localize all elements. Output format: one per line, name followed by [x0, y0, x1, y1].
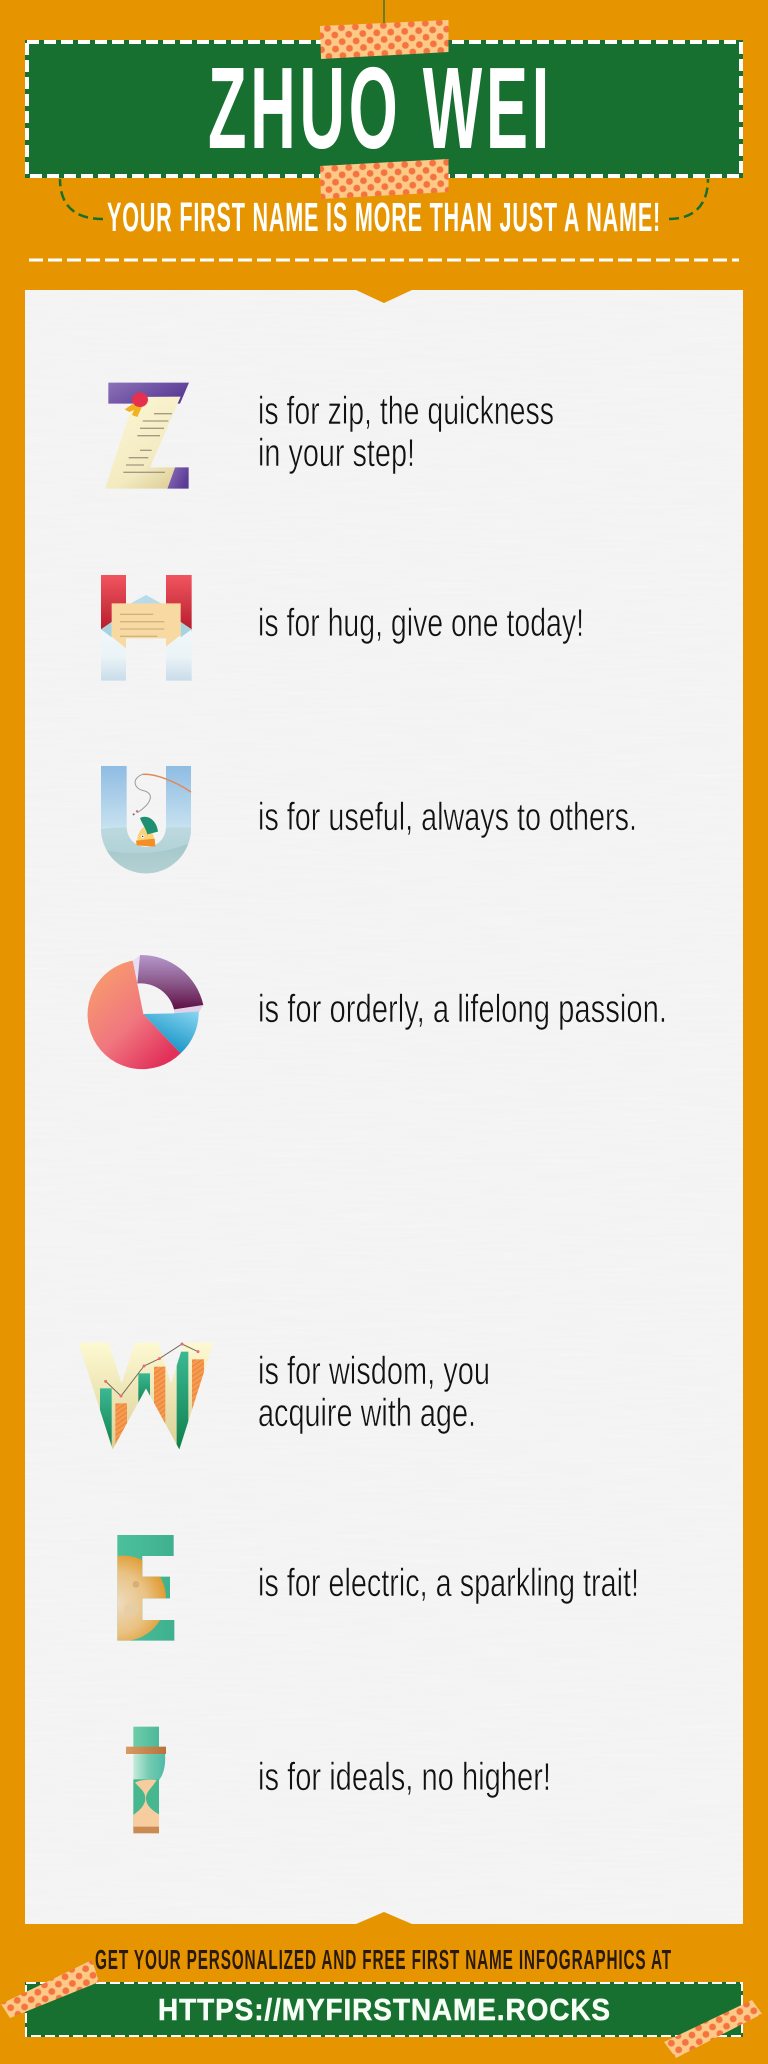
text: W: acquire with age.	[258, 1392, 476, 1435]
text: E: is for electric, a sparkling trait!	[258, 1562, 639, 1605]
text: W: is for wisdom, you	[258, 1350, 490, 1393]
icon: letter Z diploma	[105, 383, 189, 489]
text: I: is for ideals, no higher!	[258, 1756, 551, 1799]
row: W	[78, 1342, 490, 1450]
row: H	[101, 575, 584, 681]
hanging string	[383, 0, 385, 25]
icon: letter E moon	[117, 1535, 174, 1641]
icon: letter I hourglass	[126, 1727, 166, 1833]
footer url: HTTPS://MYFIRSTNAME.ROCKS	[158, 1992, 611, 2027]
text: Z: is for zip, the quickness	[258, 390, 554, 433]
tape: footer right	[664, 2000, 762, 2058]
row: Z	[105, 383, 554, 489]
row: O	[88, 955, 667, 1069]
row: U	[97, 766, 637, 877]
icon: letter H envelope	[101, 575, 192, 681]
panel: letters	[25, 290, 743, 1924]
icon: letter U fishing	[97, 766, 193, 877]
dashed bracket: right	[669, 179, 708, 219]
footer banner	[25, 1982, 743, 2037]
text: U: is for useful, always to others.	[258, 796, 637, 839]
text: H: is for hug, give one today!	[258, 602, 584, 645]
title banner	[25, 40, 743, 178]
tape: top	[320, 20, 448, 59]
icon: letter O pie chart	[88, 955, 203, 1069]
text: Z: in your step!	[258, 432, 415, 475]
icon: letter W bar chart	[78, 1342, 213, 1450]
tape: footer left	[1, 1960, 99, 2018]
row: I	[126, 1727, 551, 1833]
dashed bracket: left	[60, 179, 103, 219]
row: E	[81, 1535, 639, 1641]
tape: bottom	[320, 159, 448, 199]
